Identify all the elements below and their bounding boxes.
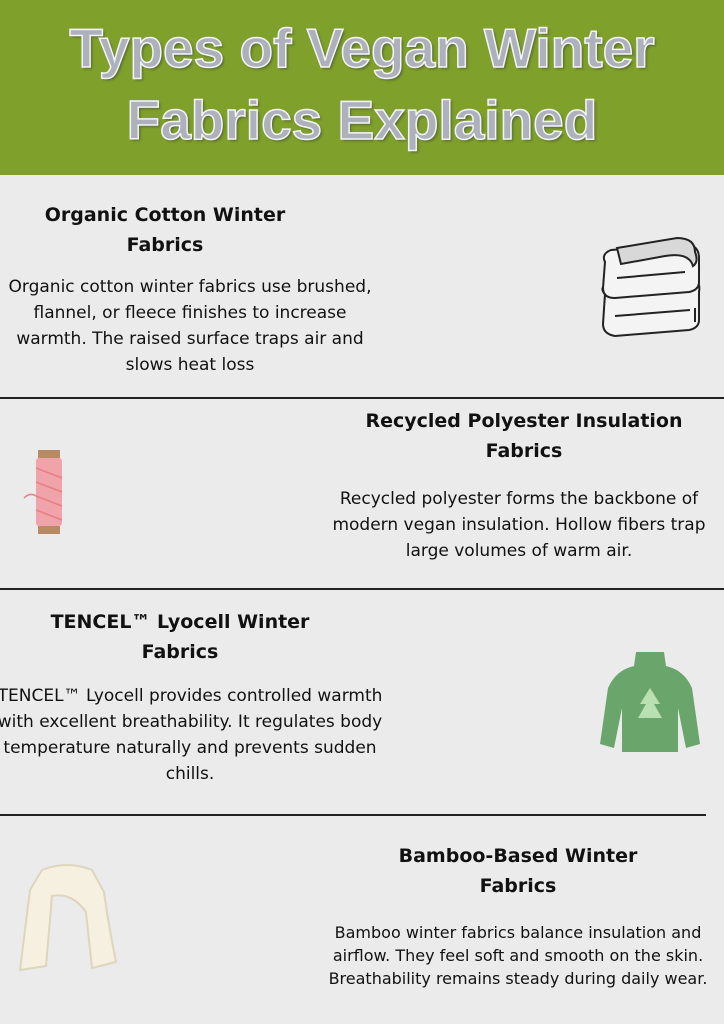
text: bamboo: Breathability remains steady during daily wear. <box>329 969 707 988</box>
text: tencel <box>0 686 382 784</box>
section: tencel <box>0 611 382 784</box>
text: recycled polyester: Recycled polyester forms the backbone of <box>340 489 698 509</box>
icon: green sweater <box>600 652 700 752</box>
section: organic cotton <box>9 204 371 375</box>
text: organic cotton: slows heat loss <box>126 355 254 375</box>
text: recycled polyester: modern vegan insulation. Hollow fibers trap <box>332 515 706 535</box>
header banner <box>0 0 724 175</box>
section: bamboo <box>329 845 707 988</box>
heading: organic cotton: Organic Cotton Winter <box>45 204 285 226</box>
text: bamboo: Bamboo winter fabrics balance insulation and <box>335 923 701 942</box>
divider <box>0 588 724 590</box>
text: bamboo <box>329 923 707 988</box>
text: bamboo: airflow. They feel soft and smooth on the skin. <box>333 946 703 965</box>
text: organic cotton: warmth. The raised surface traps air and <box>16 329 364 349</box>
heading: tencel: Fabrics <box>142 641 218 663</box>
divider <box>0 814 706 816</box>
title <box>69 17 657 154</box>
heading: recycled polyester <box>365 410 682 462</box>
text: tencel: with excellent breathability. It regulates body <box>0 712 382 732</box>
divider <box>0 397 724 399</box>
title: Fabrics Explained <box>127 89 597 151</box>
heading: bamboo: Bamboo-Based Winter <box>399 845 637 867</box>
heading: recycled polyester: Recycled Polyester Insulation <box>365 410 682 432</box>
icon: scarf <box>18 864 117 972</box>
heading: bamboo <box>399 845 638 897</box>
text: tencel: temperature naturally and prevents sudden <box>3 738 377 758</box>
icon: thread spool <box>24 450 62 534</box>
text: tencel: chills. <box>166 764 214 784</box>
title: Types of Vegan Winter <box>69 17 655 79</box>
text: organic cotton: Organic cotton winter fabrics use brushed, <box>9 277 371 297</box>
heading: organic cotton: Fabrics <box>127 234 203 256</box>
heading: recycled polyester: Fabrics <box>486 440 562 462</box>
heading: tencel: TENCEL™ Lyocell Winter <box>51 611 309 633</box>
text: organic cotton: flannel, or fleece finishes to increase <box>34 303 346 323</box>
icon: folded blankets <box>601 237 700 337</box>
section: recycled polyester <box>332 410 706 561</box>
heading: organic cotton <box>45 204 286 256</box>
text: tencel: TENCEL™ Lyocell provides controlled warmth <box>0 686 382 706</box>
heading: tencel <box>50 611 310 663</box>
text: recycled polyester <box>332 489 706 561</box>
text: organic cotton <box>9 277 371 375</box>
heading: bamboo: Fabrics <box>480 875 556 897</box>
text: recycled polyester: large volumes of warm air. <box>406 541 632 561</box>
